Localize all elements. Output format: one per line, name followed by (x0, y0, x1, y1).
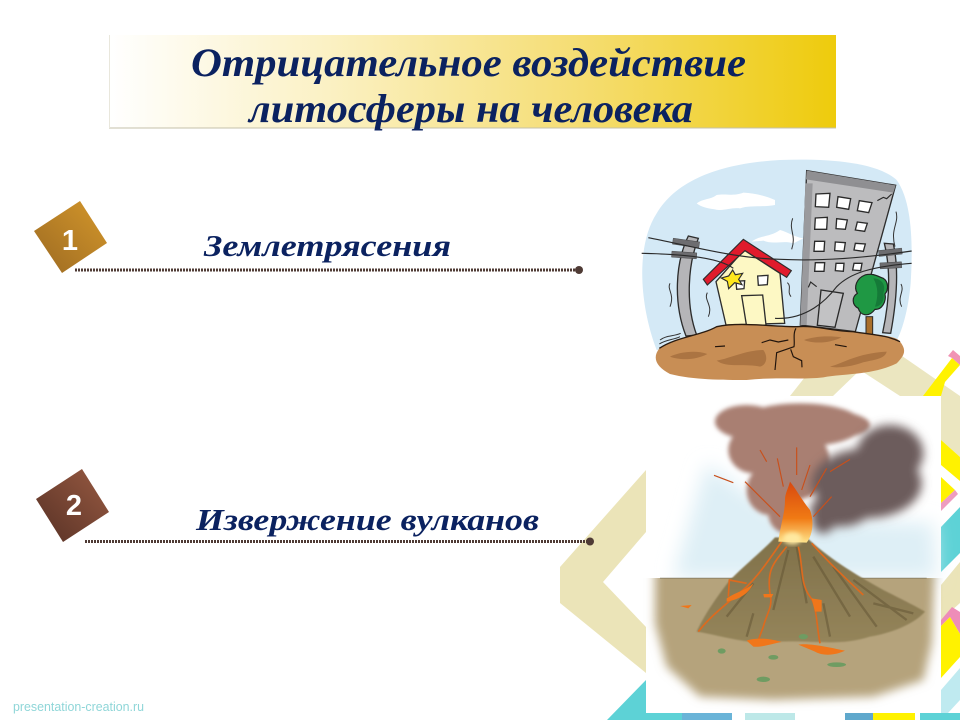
sky haze (673, 463, 937, 578)
illustration: volcano (646, 396, 941, 713)
badge 1: 1 (62, 225, 78, 257)
left utility pole (671, 236, 700, 336)
office building (800, 171, 896, 332)
ash cloud dark (810, 425, 923, 533)
mountain shadow streaks (727, 547, 913, 637)
title line 1: Отрицательное воздействие (191, 40, 746, 85)
illustration: earthquake (642, 160, 912, 380)
badge 2: 2 (66, 490, 82, 522)
ash cloud brown (715, 403, 870, 533)
heading: volcanic eruptions: Извержение вулканов (195, 502, 539, 537)
title banner (109, 35, 836, 131)
dotted leader 1 (75, 266, 583, 274)
house (703, 239, 791, 327)
tree (853, 274, 888, 335)
lava sprays (714, 447, 850, 517)
right utility pole (878, 243, 902, 333)
lava streams (698, 542, 863, 643)
power lines (642, 238, 912, 318)
heading: earthquakes: Землетрясения (203, 228, 451, 263)
shake marks (659, 212, 902, 344)
fire fountain (778, 482, 812, 543)
ground (655, 563, 935, 700)
ground specks (718, 634, 846, 682)
picture frame (646, 396, 941, 713)
lava pools (680, 583, 845, 655)
badge 1 (34, 201, 107, 273)
sky (642, 160, 912, 350)
footer watermark: presentation-creation.ru (13, 700, 144, 714)
mountain (697, 537, 925, 642)
clouds (697, 193, 803, 243)
background geometric pattern (560, 320, 960, 720)
ground crack (715, 328, 847, 370)
badge 2 (36, 469, 109, 542)
ground (656, 324, 904, 380)
title line 2: литосферы на человека (247, 86, 693, 131)
dotted leader 2 (85, 538, 594, 546)
